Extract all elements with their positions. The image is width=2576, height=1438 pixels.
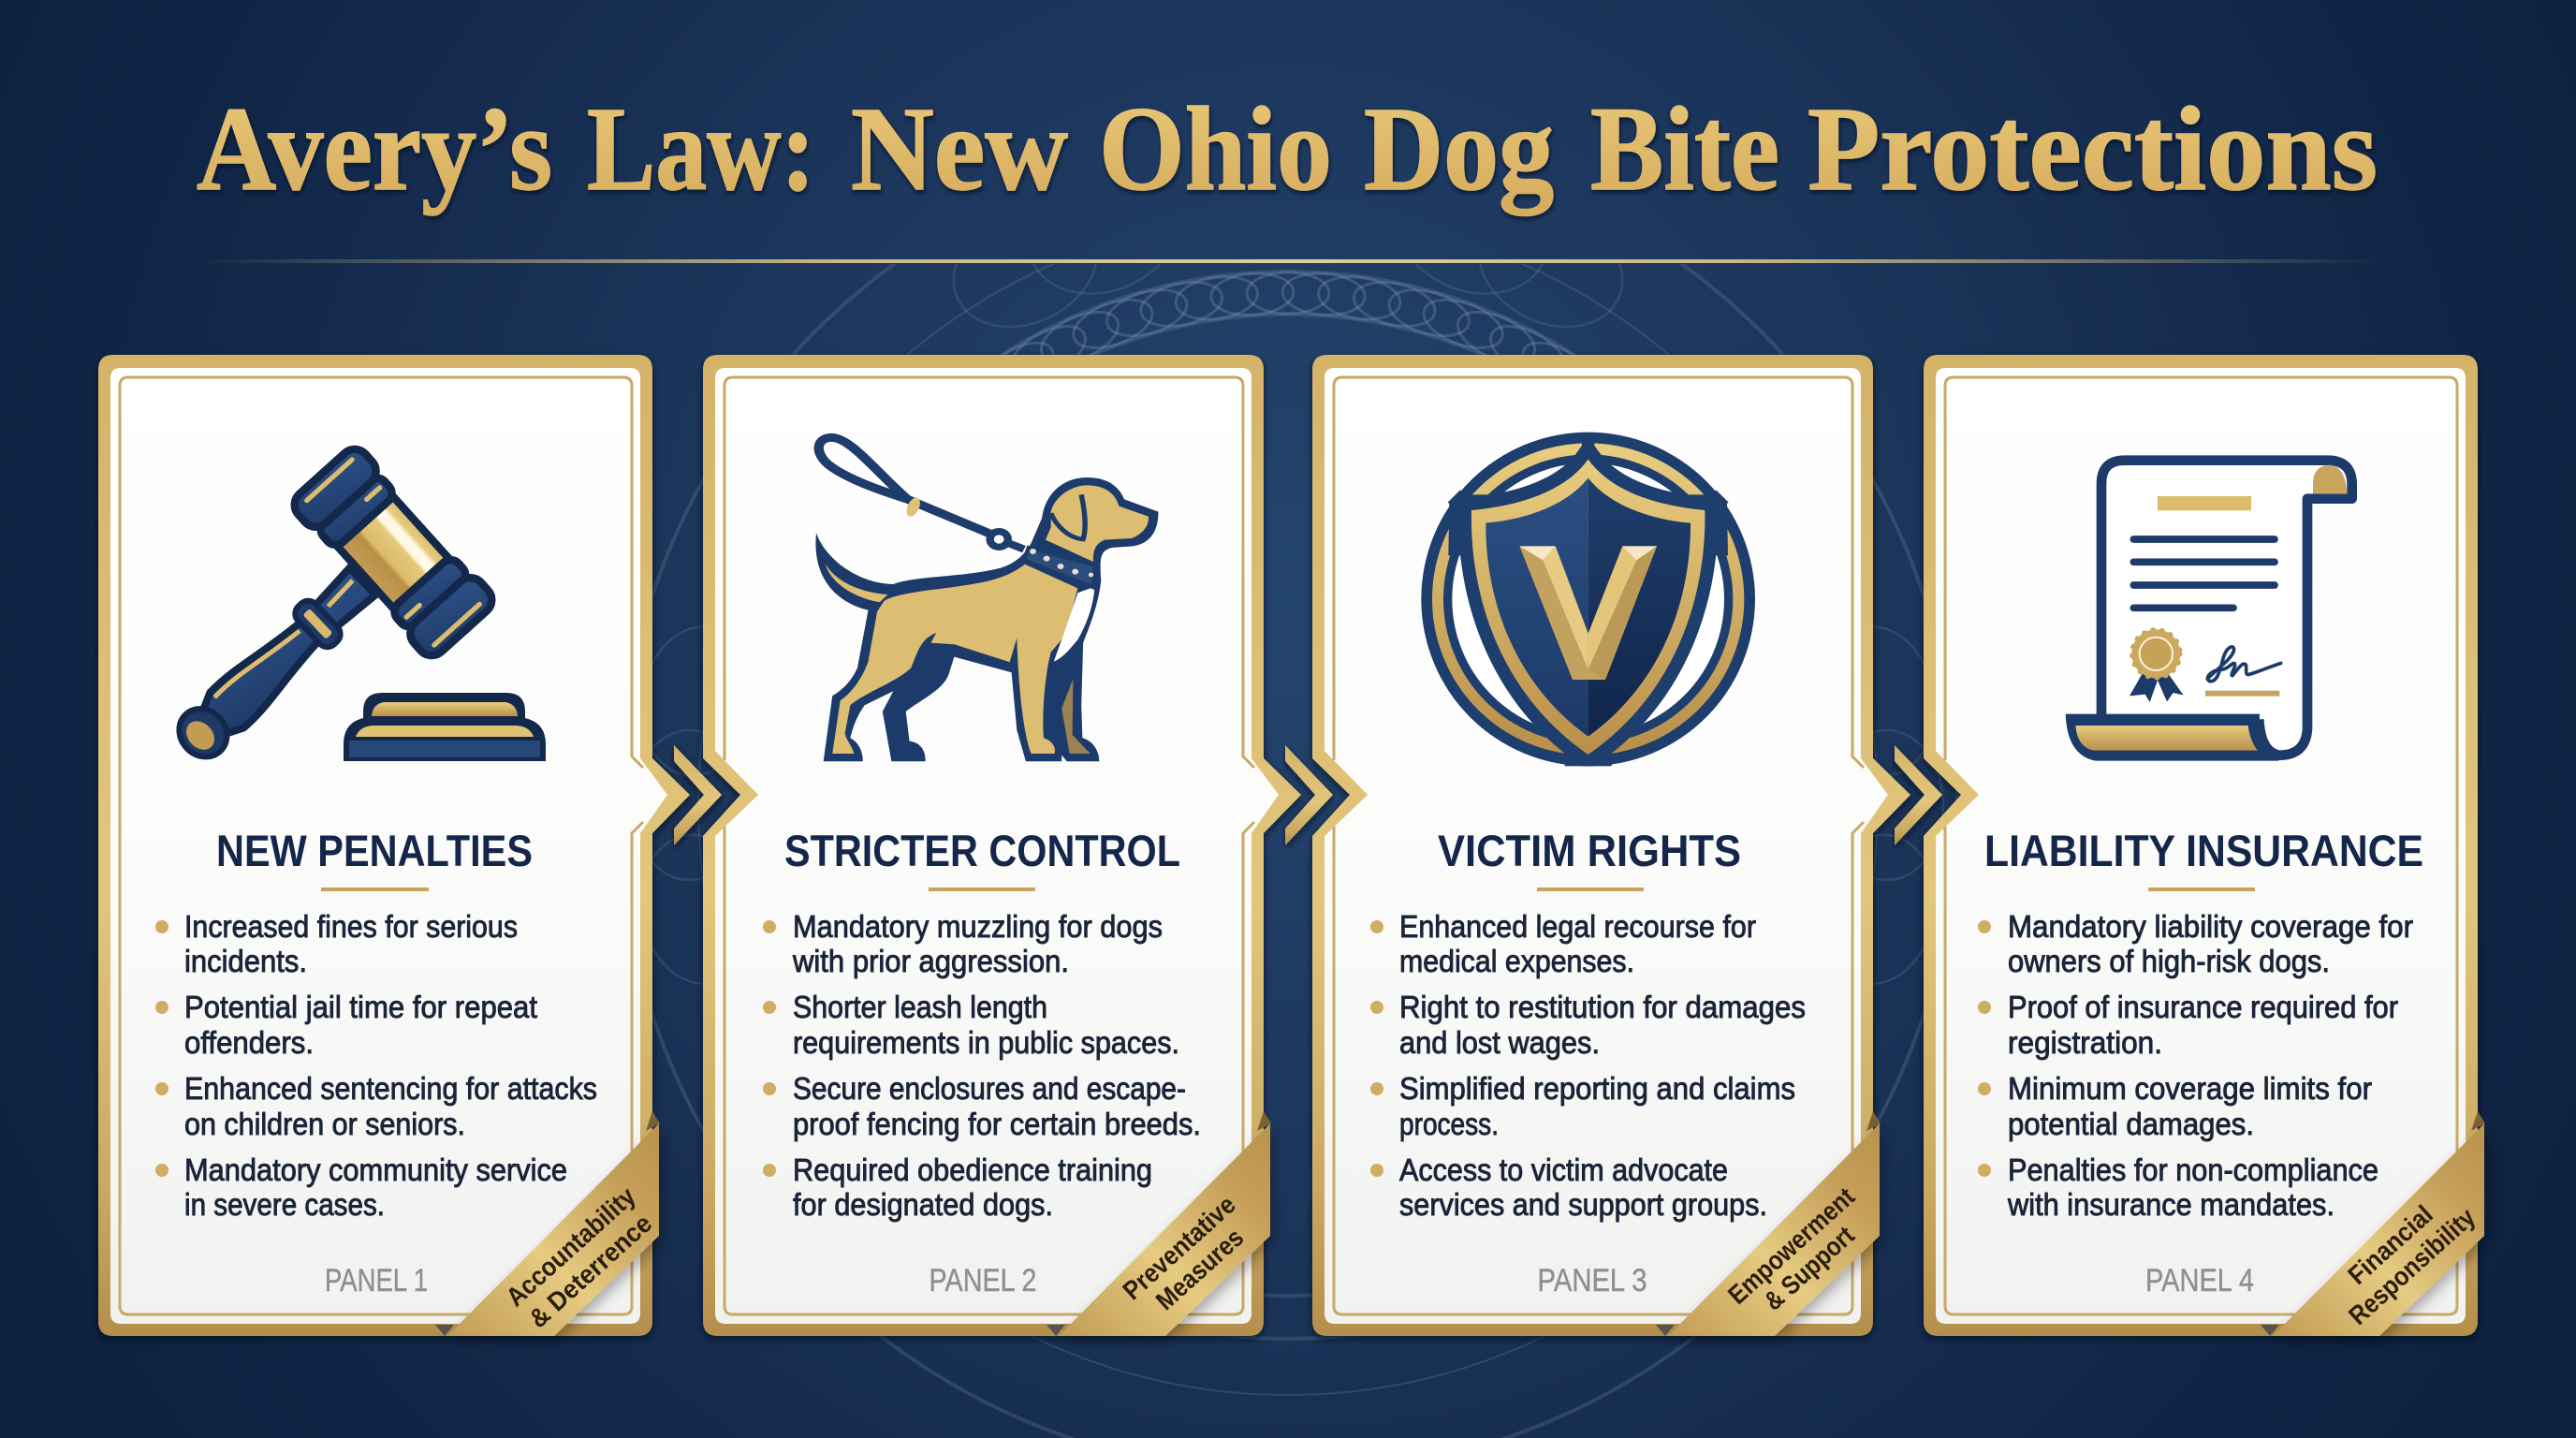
bullet: sentencing: Enhanced sentencing for attacks: [184, 1071, 597, 1106]
bullet: sentencing: [155, 1071, 597, 1141]
bullet: reporting: process.: [1399, 1107, 1499, 1141]
body: [832, 565, 1077, 754]
bullet: advocate: Access to victim advocate: [1399, 1152, 1728, 1187]
bullet: leash length: requirements in public spaces.: [793, 1025, 1179, 1060]
ribbon: financial responsibility: [2261, 1111, 2485, 1336]
bullet: enclosures: proof fencing for certain breeds.: [793, 1107, 1201, 1141]
title: [197, 82, 2378, 215]
panel: stricter control: [703, 355, 1301, 1336]
seal ribbons: [2130, 674, 2184, 702]
bullet: reporting: [1370, 1071, 1795, 1141]
bullet: proof of insurance: Proof of insurance required for: [2008, 990, 2398, 1024]
leash: [819, 437, 1024, 550]
chest: [1054, 587, 1094, 662]
bullet: fines: [155, 909, 518, 978]
ribbon: empowerment: [1656, 1111, 1881, 1336]
ribbon: accountability: & Deterrence: [523, 1209, 657, 1333]
ribbon: preventative: [1046, 1111, 1271, 1336]
letter V: [1519, 546, 1657, 680]
background guilloche seal: [652, 264, 1959, 1438]
bullet: proof of insurance: registration.: [2008, 1025, 2162, 1060]
bullet: proof of insurance: [1978, 990, 2398, 1060]
bullet: coverage limits: [1978, 1071, 2372, 1141]
bullet: fines: Increased fines for serious: [184, 909, 518, 944]
bullet: muzzling: [763, 909, 1163, 978]
seal ring: [1421, 433, 1755, 766]
bottom roll: [2066, 714, 2279, 761]
bullet: liability coverage: owners of high-risk dogs.: [2008, 944, 2330, 978]
shield: [1471, 460, 1705, 755]
ribbon: accountability: Accountability: [501, 1181, 641, 1312]
ribbon: empowerment: & Support: [1758, 1221, 1860, 1316]
title: Protections: [1808, 82, 2378, 215]
bullet: training: Required obedience training: [793, 1152, 1152, 1187]
bullet: restitution: and lost wages.: [1399, 1025, 1600, 1060]
bullet: legal recourse: medical expenses.: [1399, 944, 1634, 978]
bullet: legal recourse: [1370, 909, 1756, 978]
icon: insurance document scroll: [2066, 461, 2352, 761]
signature line: [2205, 691, 2279, 697]
ribbon: financial responsibility: Financial: [2342, 1199, 2438, 1290]
bullet: reporting: Simplified reporting and claims: [1399, 1071, 1795, 1106]
bullet: liability coverage: Mandatory liability coverage for: [2008, 909, 2413, 944]
bullet: leash length: [763, 990, 1179, 1060]
bullet: muzzling: Mandatory muzzling for dogs: [793, 909, 1163, 944]
heading: STRICTER CONTROL: [784, 826, 1180, 875]
signature: [2207, 647, 2281, 682]
bullet: jail time: offenders.: [184, 1025, 314, 1060]
icon: shield with V: [1421, 433, 1755, 766]
gavel handle: [168, 563, 381, 768]
bullet: penalties: Penalties for non-compliance: [2008, 1152, 2378, 1187]
scroll paper: [2101, 461, 2352, 756]
bullet: enclosures: [763, 1071, 1201, 1141]
arrow: panel 3 to 4: [1895, 745, 1942, 845]
ribbon: accountability: [435, 1111, 660, 1336]
collar studs: [1030, 549, 1093, 577]
bullet: penalties: [1978, 1152, 2378, 1222]
heading underline: [321, 888, 429, 891]
title: New: [851, 82, 1068, 215]
bullet: community service: in severe cases.: [184, 1187, 385, 1222]
icon: dog on leash: [815, 437, 1159, 761]
bullet: sentencing: on children or seniors.: [184, 1107, 465, 1141]
tail: [826, 564, 888, 602]
gavel head: [288, 443, 498, 662]
bullet: coverage limits: Minimum coverage limits for: [2008, 1071, 2372, 1106]
far front leg: [1061, 679, 1090, 754]
bullet: restitution: Right to restitution for damages: [1399, 990, 1806, 1024]
bullet: advocate: services and support groups.: [1399, 1187, 1767, 1222]
bullet: fines: incidents.: [184, 944, 307, 978]
bullet: training: [763, 1152, 1152, 1222]
document text lines: [2133, 539, 2275, 608]
title: Avery’s: [197, 82, 552, 215]
heading: VICTIM RIGHTS: [1438, 826, 1741, 875]
heading: NEW PENALTIES: [216, 826, 533, 875]
ribbon: financial responsibility: Responsibility: [2343, 1202, 2481, 1330]
ribbon: preventative: Preventative: [1118, 1190, 1241, 1305]
bullet: penalties: with insurance mandates.: [2007, 1187, 2334, 1222]
panel: victim rights: [1312, 355, 1910, 1336]
bullet: enclosures: Secure enclosures and escape-: [793, 1071, 1186, 1106]
panel number: PANEL 3: [1537, 1263, 1647, 1299]
panel number: PANEL 2: [929, 1263, 1037, 1299]
title: Ohio: [1099, 82, 1332, 215]
bullet: advocate: [1370, 1152, 1767, 1222]
bullet: jail time: [155, 990, 537, 1060]
icon: gavel: [168, 443, 546, 768]
heading underline: [929, 888, 1035, 891]
title: Law:: [587, 82, 815, 215]
bullet: restitution: [1370, 990, 1806, 1060]
bullet: community service: [155, 1152, 567, 1222]
ear: [1051, 494, 1085, 539]
ribbon: empowerment: Empowerment: [1722, 1181, 1860, 1310]
panel number: PANEL 4: [2145, 1263, 2254, 1299]
card frame: [703, 355, 1301, 1336]
card frame: [1924, 355, 2478, 1336]
head: [1046, 485, 1149, 562]
panel: new penalties: [98, 355, 690, 1336]
heading: LIABILITY INSURANCE: [1984, 826, 2423, 875]
sound block: [344, 693, 546, 761]
arrow: panel 1 to 2: [674, 745, 722, 845]
ribbon: preventative: Measures: [1150, 1223, 1249, 1315]
leash clip: [904, 496, 923, 519]
panel: liability insurance: [1924, 355, 2485, 1336]
title: Dog: [1364, 82, 1554, 215]
bullet: liability coverage: [1978, 909, 2413, 978]
seal: [2131, 629, 2180, 678]
bullet: coverage limits: potential damages.: [2008, 1107, 2254, 1141]
bullet: legal recourse: Enhanced legal recourse for: [1399, 909, 1756, 944]
heading underline: [2148, 888, 2255, 891]
collar: [1024, 548, 1096, 587]
bullet: leash length: Shorter leash length: [793, 990, 1047, 1024]
title: Bite: [1590, 82, 1779, 215]
top curl: [2313, 465, 2347, 493]
bullet: training: for designated dogs.: [793, 1187, 1053, 1222]
arrow: panel 2 to 3: [1285, 745, 1333, 845]
card frame: [1312, 355, 1910, 1336]
heading underline: [1537, 888, 1644, 891]
bullet: community service: Mandatory community service: [184, 1152, 567, 1187]
bullet: jail time: Potential jail time for repeat: [184, 990, 537, 1024]
dog silhouette: [815, 477, 1159, 761]
bullet: muzzling: with prior aggression.: [792, 944, 1069, 978]
title rule: [198, 259, 2382, 263]
card frame: [98, 355, 690, 1336]
panel number: PANEL 1: [325, 1263, 428, 1299]
document title bar: [2158, 496, 2251, 510]
